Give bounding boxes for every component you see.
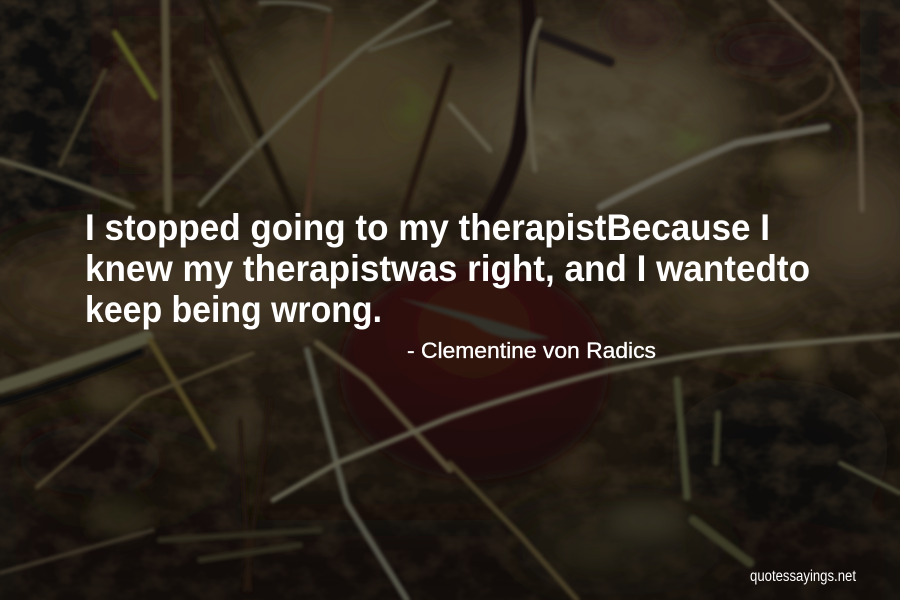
attribution: - Clementine von Radics [407, 338, 656, 363]
quote text: I stopped going to my therapistBecause I [85, 206, 770, 248]
quote text: knew my therapistwas right, and I wantedto [85, 247, 810, 289]
watermark: quotessayings.net [750, 568, 857, 585]
tomato [340, 264, 608, 480]
quote text: keep being wrong. [85, 288, 382, 330]
quote text [85, 206, 810, 330]
